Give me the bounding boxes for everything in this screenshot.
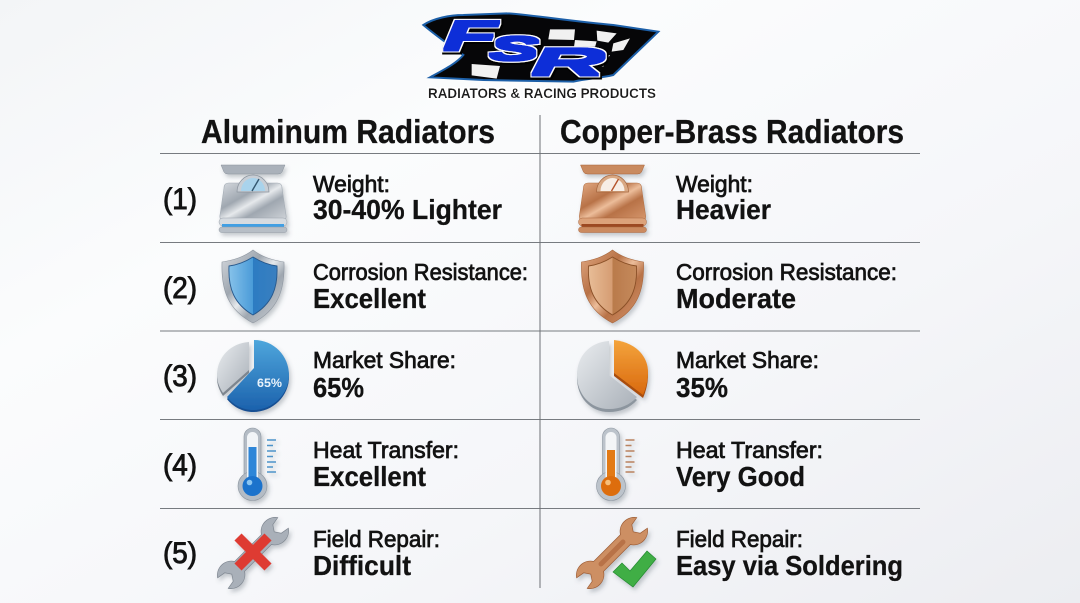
row 4: heat transfer — [596, 428, 823, 500]
logo letter S: S — [489, 30, 539, 67]
label: field repair: Field Repair: — [676, 526, 803, 552]
heading: aluminum: Aluminum Radiators — [201, 113, 495, 150]
row 3: market share — [163, 340, 456, 412]
row 1: weight — [578, 165, 771, 232]
value: 65%: 65% — [313, 372, 364, 403]
value: 35%: 35% — [676, 372, 728, 403]
label: heat transfer: Heat Transfer: — [313, 437, 459, 463]
heading: copper-brass: Copper-Brass Radiators — [560, 113, 904, 150]
panel: aluminum radiators — [163, 113, 528, 593]
value: heavier: Heavier — [676, 194, 771, 225]
label: corrosion resistance: Corrosion Resistance: — [313, 259, 528, 285]
label: market share: Market Share: — [676, 347, 819, 373]
logo letter F: F — [443, 12, 500, 59]
logo: FSR Radiators & Racing Products — [423, 12, 658, 101]
row 2: corrosion resistance — [163, 250, 528, 323]
value: 30-40% lighter: 30-40% Lighter — [313, 194, 502, 225]
row 1: weight — [163, 165, 502, 232]
value: moderate: Moderate — [676, 283, 796, 314]
icon: copper scale — [578, 165, 646, 232]
icon: wrench with red X — [213, 513, 293, 593]
number 4: (4) — [163, 449, 197, 482]
panel: copper-brass radiators — [560, 113, 904, 593]
value: excellent: Excellent — [313, 461, 426, 492]
icon: blue shield — [222, 250, 284, 323]
value: difficult: Difficult — [313, 550, 411, 581]
icon: pie chart 35% — [577, 340, 648, 412]
label: market share: Market Share: — [313, 347, 456, 373]
logo letter R: R — [531, 42, 606, 84]
number 5: (5) — [163, 537, 197, 570]
row 2: corrosion resistance — [581, 250, 897, 323]
row 5: field repair — [572, 513, 903, 593]
label: heat transfer: Heat Transfer: — [676, 437, 823, 463]
icon: blue thermometer — [238, 428, 276, 500]
value: very good: Very Good — [676, 461, 805, 492]
logo tagline: RADIATORS & RACING PRODUCTS — [428, 85, 656, 101]
pie label: 65% — [257, 376, 282, 390]
icon: silver scale — [219, 165, 287, 232]
value: easy via soldering: Easy via Soldering — [676, 550, 903, 581]
value: excellent: Excellent — [313, 283, 426, 314]
number 2: (2) — [163, 272, 197, 305]
row 3: market share — [577, 340, 819, 412]
label: field repair: Field Repair: — [313, 526, 440, 552]
label: corrosion resistance: Corrosion Resistance: — [676, 259, 897, 285]
icon: copper wrench with green check — [572, 513, 656, 593]
logo swoosh and checkered flag — [423, 13, 658, 82]
icon: orange thermometer — [596, 428, 634, 500]
row 5: field repair — [163, 513, 440, 593]
label: weight: Weight: — [313, 171, 390, 197]
icon: pie chart 65% — [217, 340, 289, 412]
number 1: (1) — [163, 183, 197, 216]
row 4: heat transfer — [163, 428, 459, 500]
icon: copper shield — [581, 250, 644, 323]
label: weight: Weight: — [676, 171, 753, 197]
number 3: (3) — [163, 360, 197, 393]
